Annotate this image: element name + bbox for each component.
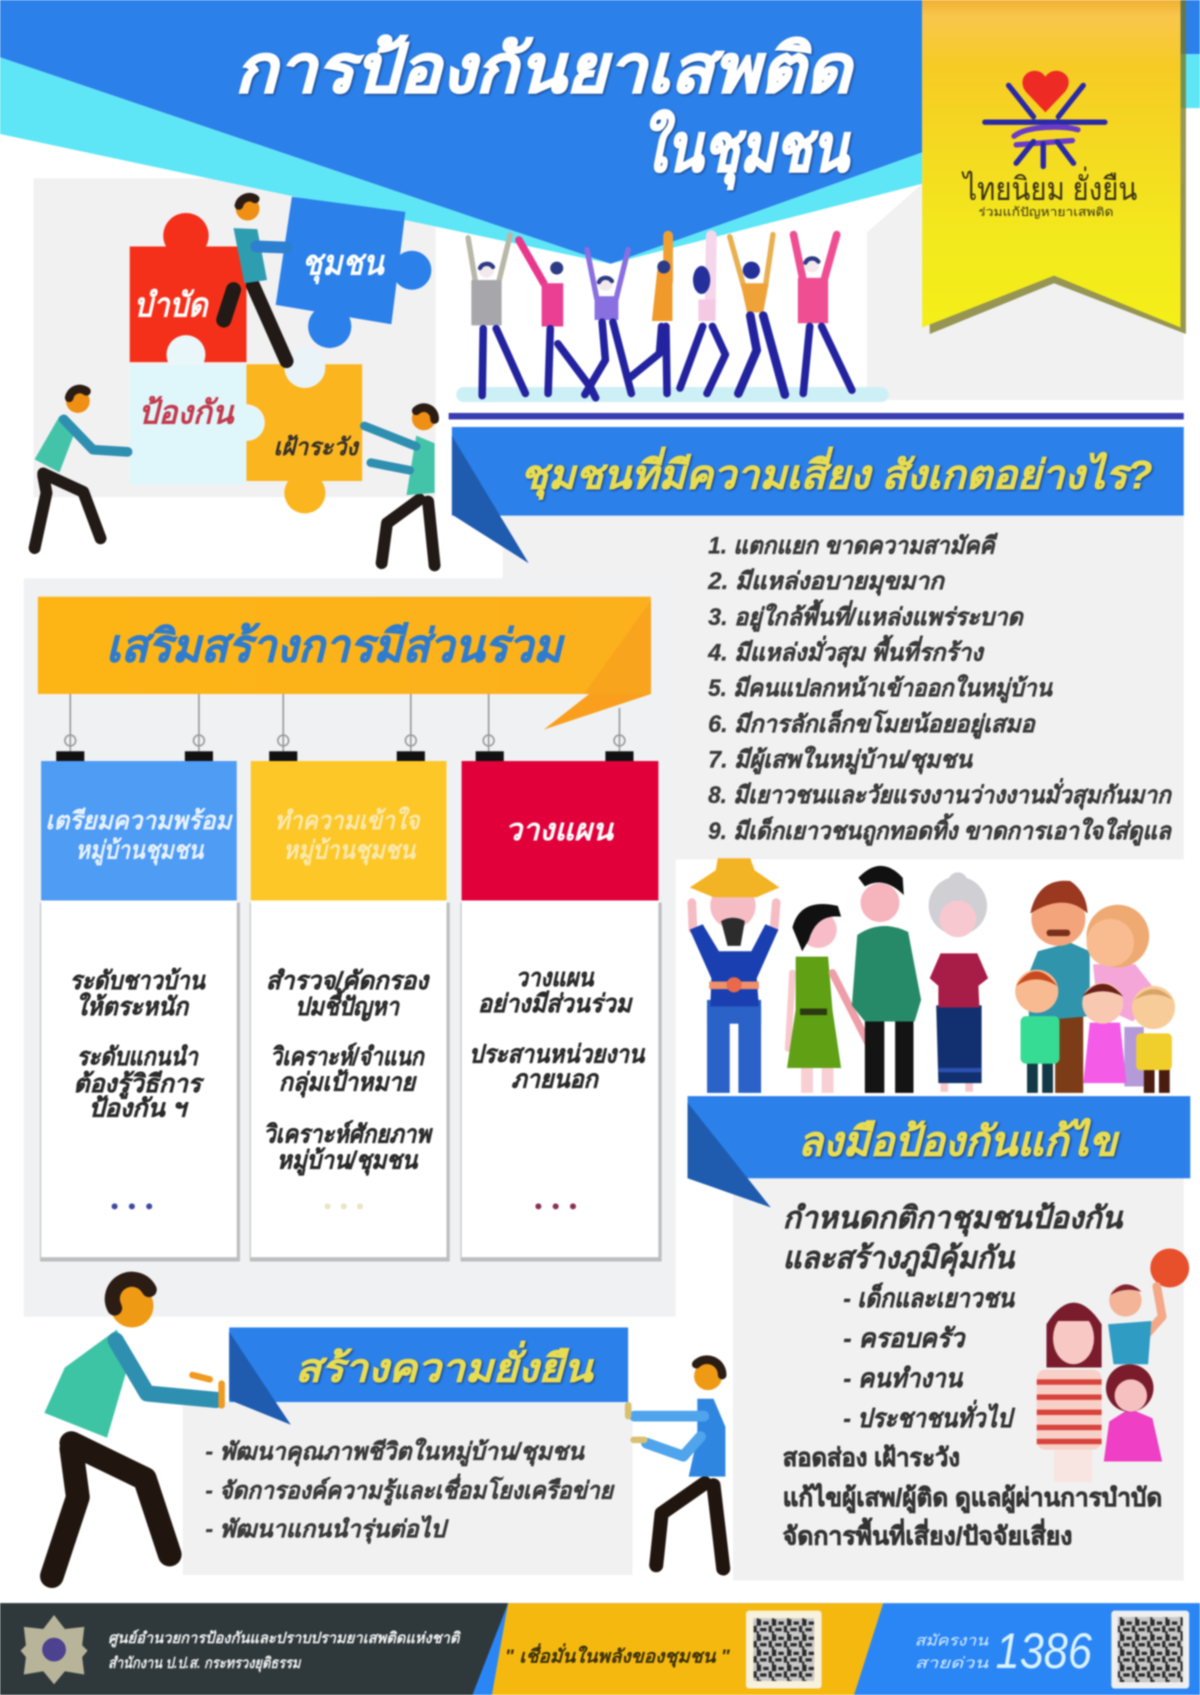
panel: participation backdrop (24, 578, 676, 1317)
card: prepare: เตรียมความพร้อม (45, 807, 233, 835)
person 3 (585, 250, 631, 395)
floor shadow under crowd (456, 387, 889, 402)
figure: grandmother (929, 872, 988, 1092)
icon: logo figures (985, 85, 1105, 166)
card: plan: วางแผน (505, 814, 614, 847)
text: risk list: 9. มีเด็กเยาวชนถูกทอดทิ้ง ขาดการเอาใจใส่ดูแล (708, 813, 1172, 846)
panel: puzzle backdrop (34, 178, 436, 497)
puzzle: blue piece: ชุมชน (302, 245, 385, 285)
text: action block (783, 1202, 1162, 1551)
figure: large man left (44, 1279, 222, 1576)
text: sustainability list: - พัฒนาแกนนำรุ่นต่อไป (205, 1515, 449, 1544)
text: action block: - ประชาชนทั่วไป (843, 1399, 1016, 1433)
hotline label: สายด่วน (915, 1655, 989, 1672)
figure: girl in stripes (1037, 1303, 1102, 1482)
person 5 (680, 236, 725, 393)
banner: risk community heading (452, 427, 1184, 563)
title: ในชุมชน (640, 109, 851, 190)
person 2 (519, 240, 596, 398)
puzzle: blue piece (276, 197, 431, 348)
text: risk list: 5. มีคนแปลกหน้าเข้าออกในหมู่บ้าน (708, 674, 1054, 703)
text: risk list (707, 532, 1172, 846)
card: prepare (40, 761, 240, 1262)
icon: logo heart (1022, 71, 1069, 112)
card: understand: หมู่บ้านชุมชน (283, 836, 416, 865)
card: understand: หมู่บ้าน/ชุมชน (277, 1147, 418, 1176)
figure: farmer (690, 858, 779, 1093)
title: การป้องกันยาเสพติด (235, 32, 854, 107)
figure: left puzzle man (35, 389, 128, 548)
person 6 (730, 235, 785, 395)
card: prepare: ให้ตระหนัก (76, 992, 190, 1021)
figure: man in blue right (628, 1360, 725, 1569)
text: action block: - คนทำงาน (843, 1365, 963, 1393)
text: risk list: 7. มีผู้เสพในหมู่บ้าน/ชุมชน (708, 746, 974, 775)
text: risk list: 2. มีแหล่งอบายมุขมาก (707, 568, 945, 596)
text: sustainability list: - จัดการองค์ความรู้และเชื่อมโยงเครือข่าย (205, 1473, 615, 1505)
banner: participation heading (38, 597, 651, 730)
text: risk list: 3. อยู่ใกล้พื้นที่/แหล่งแพร่ระบาด (708, 599, 1024, 632)
puzzle: yellow piece (246, 347, 362, 513)
card: understand: วิเคราะห์ศักยภาพ (263, 1120, 433, 1149)
card: understand: ปมชี้ปัญหา (295, 988, 400, 1022)
text: action block: สอดส่อง เฝ้าระวัง (783, 1444, 960, 1472)
text: action block: จัดการพื้นที่เสี่ยง/ปัจจัยเสี่ยง (783, 1518, 1072, 1551)
puzzle: red piece: บำบัด (134, 288, 210, 325)
text: risk list: 6. มีการลักเล็กขโมยน้อยอยู่เสมอ (708, 709, 1036, 739)
card: plan: ภายนอก (511, 1065, 600, 1093)
footer slogan: " เชื่อมั่นในพลังของชุมชน " (505, 1643, 730, 1669)
puzzle: pale piece (130, 365, 264, 484)
card: understand: กลุ่มเป้าหมาย (279, 1069, 417, 1098)
puzzle: red piece (130, 213, 246, 374)
card: understand: วิเคราะห์/จำแนก (270, 1042, 425, 1071)
person 7 (794, 235, 852, 393)
text: risk list: 8. มีเยาวชนและวัยแรงงานว่างงานมั่วสุมกันมาก (708, 778, 1172, 810)
card: plan: อย่างมีส่วนร่วม (478, 990, 633, 1018)
text: action block: กำหนดกติกาชุมชนป้องกัน (783, 1202, 1123, 1237)
card: plan: วางแผน (516, 964, 594, 992)
panel: crowd backdrop (867, 184, 1184, 400)
icon: basketball (1150, 1249, 1189, 1287)
hotline label (915, 1632, 989, 1672)
footer (0, 1603, 1200, 1695)
footer agency text: สำนักงาน ป.ป.ส. กระทรวงยุติธรรม (108, 1655, 301, 1673)
figure: family group (1015, 881, 1175, 1093)
figure: man on puzzle (224, 197, 286, 361)
hotline number: 1386 (996, 1623, 1092, 1679)
text: sustainability list: - พัฒนาคุณภาพชีวิตในหมู่บ้าน/ชุมชน (205, 1437, 585, 1466)
family illustration (690, 858, 1175, 1093)
banner: action heading: ลงมือป้องกันแก้ไข (798, 1118, 1120, 1165)
card: plan: ประสานหน่วยงาน (469, 1041, 645, 1069)
footer agency text (108, 1629, 461, 1673)
figure: tall man (852, 866, 921, 1093)
card: understand (250, 761, 450, 1262)
text: action block: แก้ไขผู้เสพ/ผู้ติด ดูแลผู้ผ่านการบำบัด (783, 1482, 1162, 1514)
text: action block: และสร้างภูมิคุ้มกัน (783, 1242, 1015, 1277)
card: plan (461, 761, 662, 1262)
divider line (449, 413, 1184, 419)
banner: risk community heading: ชุมชนที่มีความเสี่ยง สังเกตอย่างไร? (520, 447, 1152, 501)
card: prepare: ระดับแกนนำ (77, 1043, 199, 1071)
card: prepare: ต้องรู้วิธีการ (74, 1070, 205, 1099)
banner: sustainability heading: สร้างความยั่งยืน (295, 1341, 594, 1391)
text: sustainability list (205, 1437, 615, 1544)
youth illustration (1037, 1249, 1189, 1482)
banner: participation heading: เสริมสร้างการมีส่วนร่วม (106, 621, 565, 672)
qr code right (1111, 1611, 1189, 1689)
puzzle: pale piece: ป้องกัน (138, 395, 235, 431)
logo tagline: ร่วมแก้ปัญหายาเสพติด (978, 205, 1114, 219)
card: prepare: หมู่บ้านชุมชน (76, 836, 204, 865)
card: understand: สำรวจ/คัดกรอง (266, 967, 430, 995)
card: understand: ทำความเข้าใจ (275, 806, 421, 835)
panel: risk list backdrop (503, 516, 1184, 859)
figure: boy with ball (1108, 1284, 1162, 1364)
figure: girl in pink (1104, 1364, 1162, 1462)
crowd of people cheering (468, 235, 852, 398)
text: action block: - ครอบครัว (843, 1325, 967, 1353)
text: risk list: 1. แตกแยก ขาดความสามัคคี (708, 532, 998, 559)
ribbon with logo (922, 0, 1186, 334)
card: prepare: ระดับชาวบ้าน (70, 967, 206, 995)
title (235, 32, 854, 190)
text: action block: - เด็กและเยาวชน (843, 1282, 1015, 1313)
header band (0, 0, 1200, 264)
text: risk list: 4. มีแหล่งมั่วสุม พื้นที่รกร้าง (707, 634, 985, 667)
panel: sustainability backdrop (183, 1402, 632, 1575)
panel: action backdrop (733, 1178, 1184, 1580)
person 1 (468, 235, 525, 396)
qr code left (746, 1611, 822, 1689)
puzzle: yellow piece: เฝ้าระวัง (274, 434, 360, 461)
logo wordmark: ไทยนิยม ยั่งยืน (961, 166, 1137, 207)
icon: emblem (21, 1615, 88, 1684)
hotline label: สมัครงาน (915, 1632, 989, 1649)
banner: sustainability heading (229, 1327, 628, 1425)
person 4 (630, 236, 672, 393)
footer agency text: ศูนย์อำนวยการป้องกันและปราบปรามยาเสพติดแห่งชาติ (108, 1629, 461, 1648)
banner: action heading (688, 1096, 1190, 1207)
figure: woman in green (787, 904, 868, 1093)
card: prepare: ป้องกัน ฯ (89, 1095, 189, 1123)
hanging clips (56, 694, 634, 764)
figure: right puzzle man (364, 406, 436, 565)
